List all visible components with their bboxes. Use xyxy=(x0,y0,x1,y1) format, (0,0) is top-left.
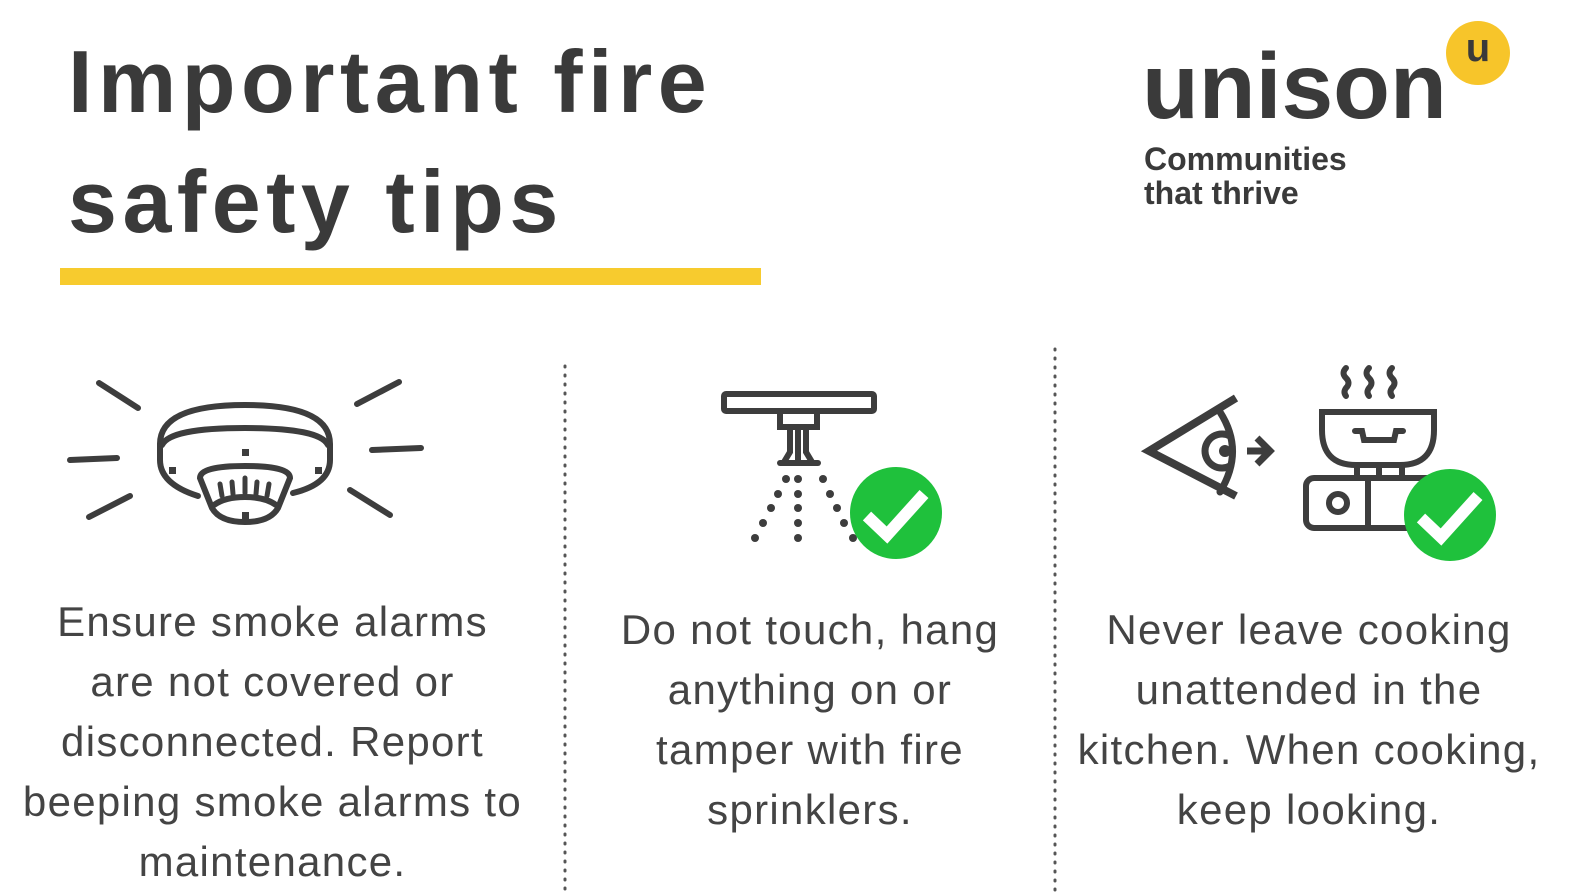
title: Important fire xyxy=(68,32,712,131)
text: smoke alarms: maintenance. xyxy=(139,838,406,885)
tagline: Communities xyxy=(1144,141,1347,177)
title xyxy=(68,32,712,251)
text: smoke alarms: disconnected. Report xyxy=(61,718,484,765)
logo circle xyxy=(1446,21,1510,85)
text: smoke alarms xyxy=(23,598,522,885)
logo xyxy=(1142,21,1510,211)
text: cooking xyxy=(1078,606,1540,833)
tagline: that thrive xyxy=(1144,175,1299,211)
icon: check xyxy=(850,467,942,559)
text: cooking: Never leave cooking xyxy=(1106,606,1512,653)
text: cooking: unattended in the xyxy=(1136,666,1482,713)
title underline xyxy=(60,268,761,285)
title: safety tips xyxy=(68,152,564,251)
text: cooking: kitchen. When cooking, xyxy=(1078,726,1540,773)
logo circle: u xyxy=(1466,26,1490,70)
logo wordmark: unison xyxy=(1142,34,1447,138)
icon: eye and stove xyxy=(1149,368,1496,561)
icon: sprinkler xyxy=(724,394,942,559)
text: sprinklers: anything on or xyxy=(668,666,952,713)
tagline xyxy=(1144,141,1347,211)
text: smoke alarms: are not covered or xyxy=(90,658,455,705)
text: sprinklers: sprinklers. xyxy=(707,786,913,833)
text: sprinklers: tamper with fire xyxy=(656,726,964,773)
text: cooking: keep looking. xyxy=(1177,786,1441,833)
text: smoke alarms: beeping smoke alarms to xyxy=(23,778,522,825)
icon: smoke alarm xyxy=(70,382,421,522)
text: sprinklers xyxy=(621,606,999,833)
text: sprinklers: Do not touch, hang xyxy=(621,606,999,653)
dividers xyxy=(564,366,566,896)
text: smoke alarms: Ensure smoke alarms xyxy=(57,598,488,645)
